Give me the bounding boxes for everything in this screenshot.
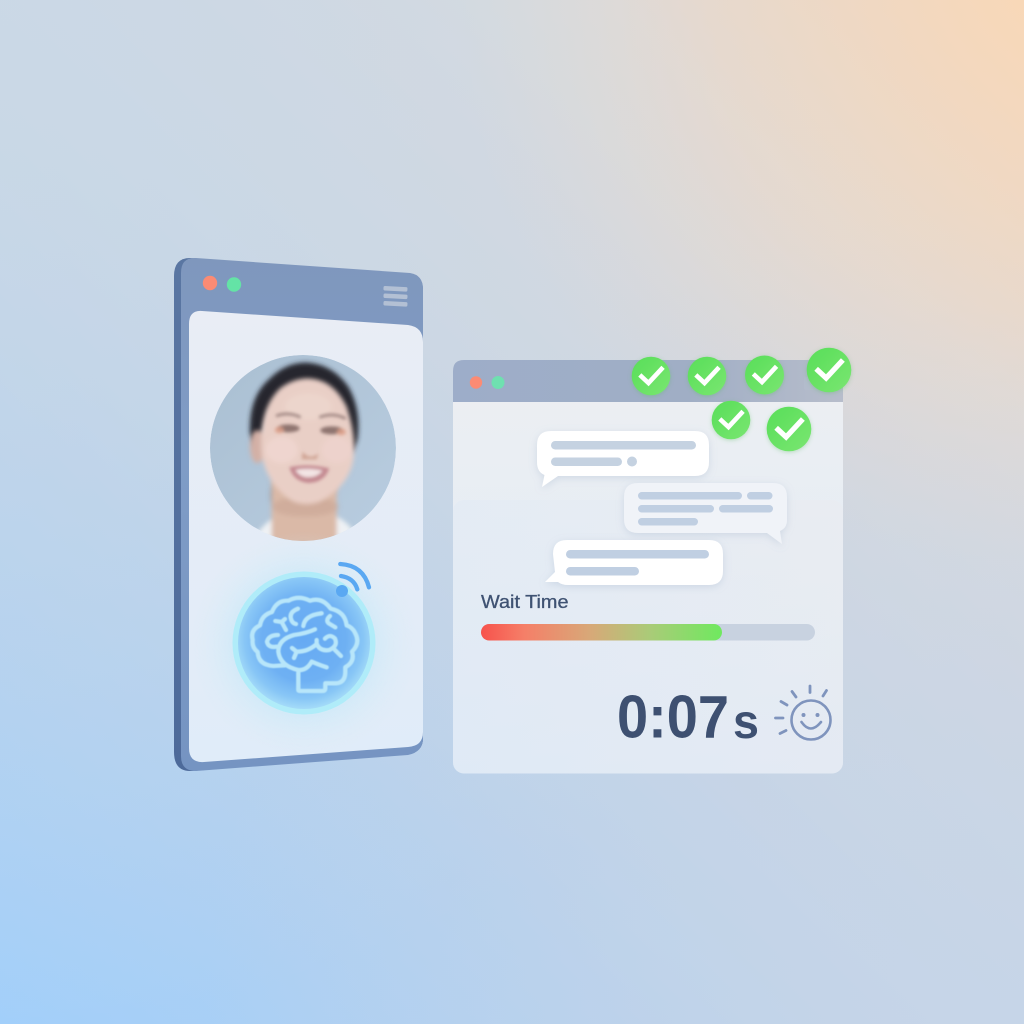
icon: menu [383, 286, 408, 307]
orb glow [192, 531, 416, 755]
window dots [203, 276, 241, 292]
header square [804, 377, 818, 390]
panel: chat window [453, 360, 843, 774]
window body [453, 360, 843, 774]
timer: 0:07s: 0:07 [617, 684, 729, 750]
phone screen panel [189, 311, 423, 762]
icon: brain [252, 598, 357, 691]
window header [453, 360, 843, 402]
icon: smiley with rays [776, 686, 830, 740]
timer: 0:07s: s [733, 696, 759, 749]
check 6 [767, 407, 811, 451]
green check badges [632, 348, 851, 451]
check 3 [745, 356, 784, 394]
portrait photo [210, 355, 396, 550]
check 1 [632, 357, 670, 395]
chat bubble 2 [624, 483, 787, 544]
progress bar [481, 624, 815, 640]
check 5 [712, 401, 750, 439]
panel: phone with agent [174, 258, 423, 771]
check 2 [688, 357, 726, 395]
check 4 [807, 348, 851, 392]
label: wait time: Wait Time [481, 591, 568, 612]
brain orb [192, 531, 416, 755]
icon: signal [336, 564, 369, 597]
chat bubble 1 [537, 431, 709, 487]
window dots [470, 376, 504, 389]
phone side edge [174, 258, 423, 771]
chat bubble 3 [545, 540, 723, 585]
phone body [181, 258, 423, 771]
